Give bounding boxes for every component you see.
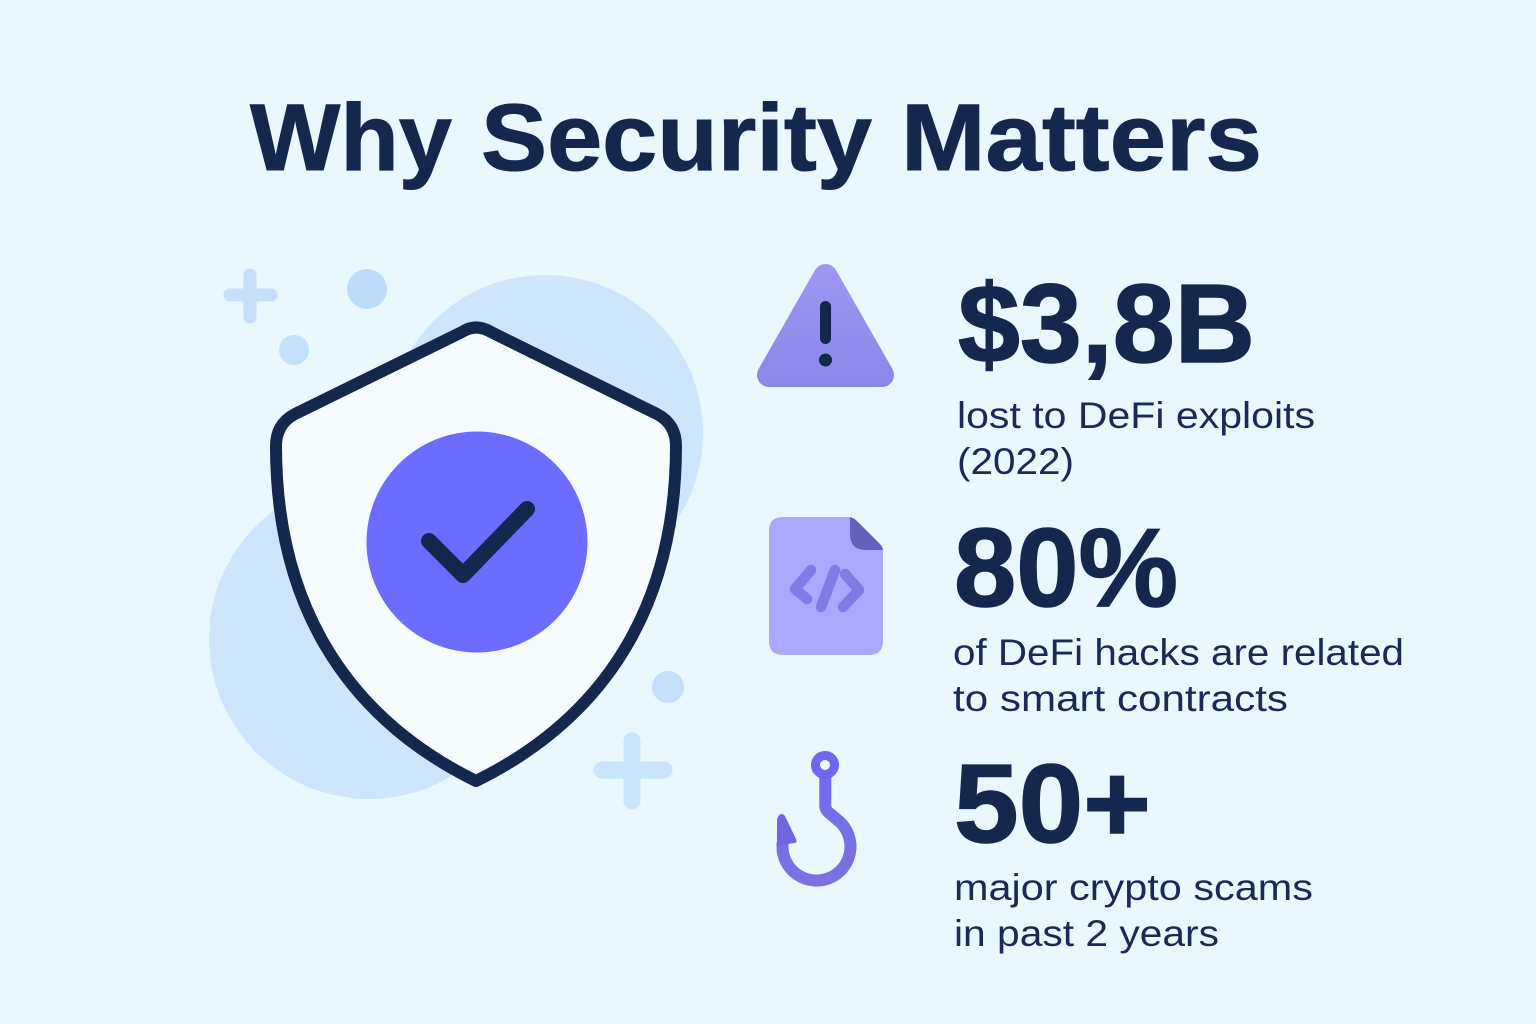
decorative plus: lower right bbox=[602, 741, 664, 801]
shield bbox=[276, 328, 676, 781]
decorative circle: lower left backdrop bbox=[209, 479, 529, 799]
illustration: shield with decorations bbox=[209, 269, 703, 801]
decorative dot: lower right bbox=[652, 671, 684, 703]
stat description: (2022) bbox=[957, 441, 1074, 482]
stat value: 80% bbox=[954, 506, 1178, 630]
stat description: in past 2 years bbox=[954, 913, 1219, 954]
stat value: $3,8B bbox=[958, 262, 1255, 386]
decorative plus: top left bbox=[230, 275, 271, 317]
stat description: of DeFi hacks are related bbox=[953, 632, 1404, 673]
check badge circle bbox=[366, 432, 588, 652]
stat description: lost to DeFi exploits bbox=[957, 395, 1315, 436]
icon: code file bbox=[769, 517, 883, 655]
decorative circle: upper right backdrop bbox=[387, 275, 703, 591]
stat description: to smart contracts bbox=[953, 678, 1288, 719]
icon: warning triangle bbox=[769, 276, 882, 375]
stat 1 bbox=[957, 262, 1315, 482]
icon: fishing hook bbox=[777, 756, 850, 881]
title: Matters bbox=[901, 85, 1262, 191]
title: Security bbox=[481, 85, 872, 191]
title: Why bbox=[250, 85, 452, 191]
decorative dot: top bbox=[347, 269, 387, 309]
check mark bbox=[429, 509, 527, 575]
stat description: major crypto scams bbox=[954, 867, 1313, 908]
stat value: 50+ bbox=[954, 742, 1151, 866]
decorative dot: small left bbox=[279, 335, 309, 365]
stat 2 bbox=[953, 506, 1404, 719]
stat 3 bbox=[954, 742, 1313, 954]
